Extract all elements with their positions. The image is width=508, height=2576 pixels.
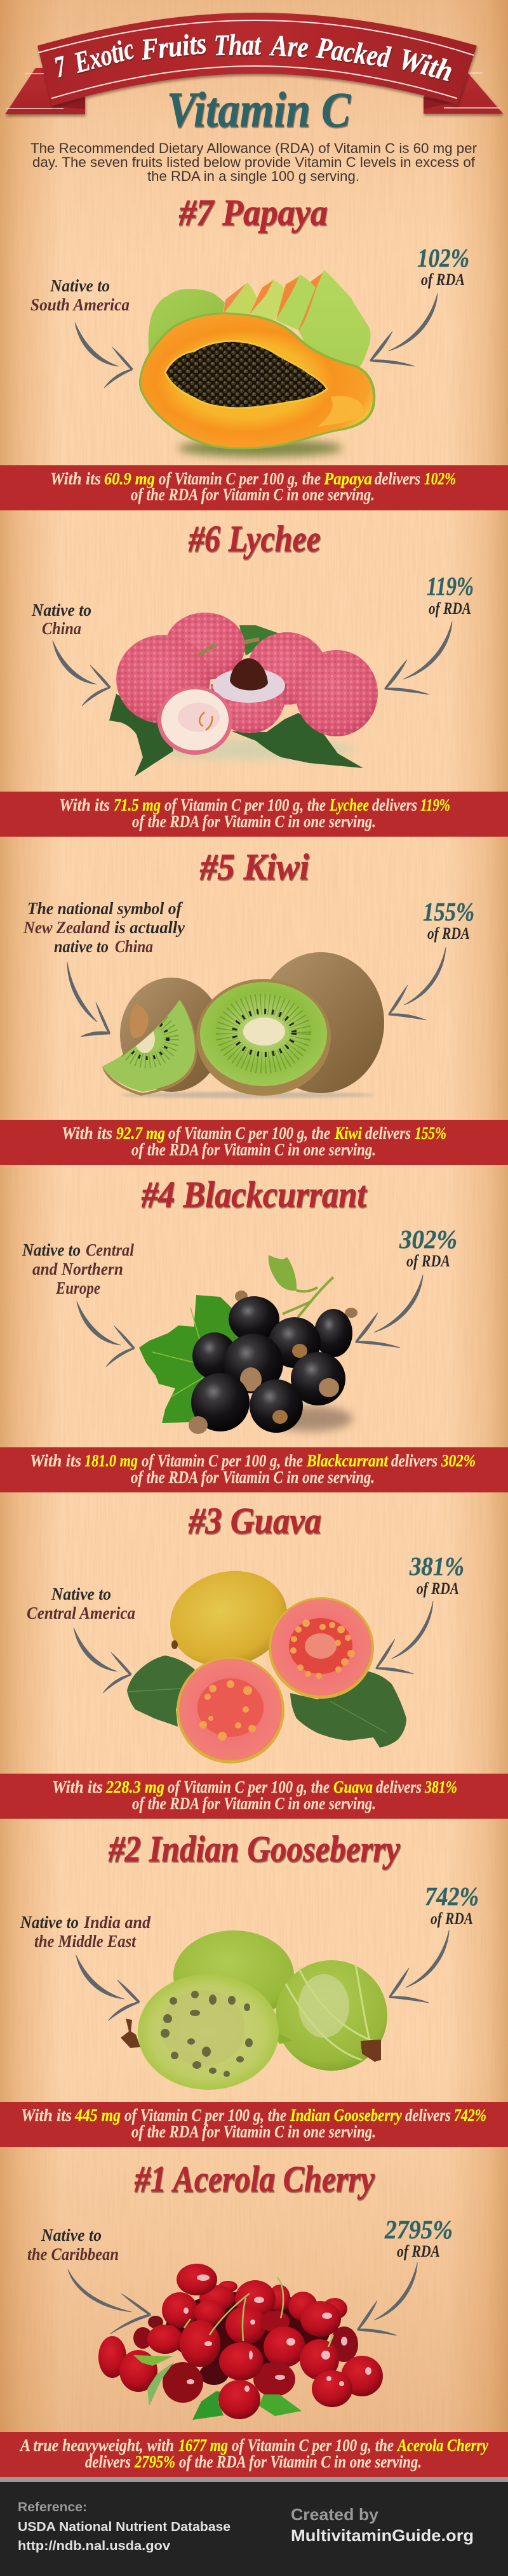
fact band: of Vitamin C per 100 g, the (124, 2106, 286, 2125)
fact band: delivers (391, 1451, 438, 1470)
fact band: of Vitamin C per 100 g, the (142, 1451, 303, 1470)
RDA stat (384, 2215, 453, 2261)
title text: Fruits (139, 27, 208, 67)
RDA stat: 155% (423, 897, 474, 926)
origin note: China (42, 619, 81, 638)
fact band: delivers (375, 469, 420, 488)
kiwi illustration (102, 952, 384, 1098)
fact band: 445 mg (74, 2106, 121, 2125)
fact band: 228.3 mg (105, 1777, 164, 1796)
fact band: 2795% (134, 2452, 175, 2471)
fact band: With its (30, 1451, 81, 1470)
panel: acerola cherry (0, 2158, 508, 2477)
arrow right (358, 2262, 417, 2335)
arrow right (389, 1930, 449, 2003)
fact band (0, 2102, 508, 2147)
reference block (18, 2500, 231, 2553)
arrow left (77, 1301, 135, 1367)
RDA stat: of RDA (427, 924, 470, 943)
title ribbon banner (5, 13, 503, 114)
RDA stat (427, 571, 474, 618)
cherry stems (184, 2278, 333, 2347)
origin note: Native to (31, 601, 91, 620)
origin note: Central America (27, 1603, 135, 1623)
RDA stat: of RDA (429, 599, 471, 618)
fact band: of Vitamin C per 100 g, the (159, 469, 321, 488)
arrow right (389, 947, 446, 1020)
reference block: http://ndb.nal.usda.gov (18, 2539, 171, 2553)
arrow right (370, 293, 438, 366)
RDA stat: of RDA (431, 1909, 473, 1928)
credit block (291, 2505, 474, 2545)
RDA stat: of RDA (397, 2242, 440, 2261)
fact band: delivers (376, 1777, 422, 1796)
origin note: native to (54, 937, 109, 956)
origin note: Native to (50, 276, 110, 295)
heading: #4 Blackcurrant (141, 1174, 368, 1215)
RDA stat: 742% (425, 1882, 479, 1911)
fact band: Indian Gooseberry (290, 2106, 403, 2125)
RDA stat (423, 897, 474, 943)
title text: Are (269, 29, 309, 64)
origin note (27, 2226, 119, 2264)
heading: #7 Papaya (178, 192, 328, 233)
fact band: of the RDA for Vitamin C in one serving. (131, 485, 375, 504)
arrow left (53, 641, 110, 706)
fact band: Papaya (323, 469, 372, 488)
RDA stat (417, 243, 469, 289)
fact band: 1677 mg (178, 2436, 228, 2455)
arrow right (356, 1275, 423, 1348)
origin note (20, 1913, 150, 1951)
intro paragraph: the RDA in a single 100 g serving. (147, 168, 359, 184)
fact band: With its (52, 1777, 103, 1796)
RDA stat: 302% (399, 1225, 457, 1254)
intro paragraph: The Recommended Dietary Allowance (RDA) of Vitamin C is 60 mg per (30, 140, 477, 156)
fact band: With its (21, 2106, 72, 2125)
fact band: of Vitamin C per 100 g, the (168, 1124, 330, 1143)
fact band: of Vitamin C per 100 g, the (168, 1777, 330, 1796)
lychee illustration (109, 613, 378, 776)
fact band: With its (62, 1124, 112, 1143)
heading: #3 Guava (188, 1500, 321, 1541)
origin note: Europe (55, 1278, 100, 1298)
panel: guava (0, 1500, 508, 1819)
RDA stat (425, 1882, 479, 1928)
banner arc (37, 13, 477, 106)
title text (51, 27, 457, 88)
arrow left (67, 962, 110, 1037)
RDA stat: of RDA (421, 270, 465, 289)
panel: papaya (0, 192, 508, 510)
fact band: 102% (424, 469, 456, 488)
origin note: and Northern (32, 1259, 123, 1278)
fact band: Guava (333, 1777, 373, 1796)
fact band: A true heavyweight, with (19, 2436, 174, 2455)
panel: blackcurrant (0, 1174, 508, 1492)
fact band: Acerola Cherry (396, 2436, 489, 2455)
origin note: Native to (20, 1913, 79, 1932)
arrow left (74, 1628, 131, 1693)
origin note: Native to (51, 1584, 111, 1603)
credit block: MultivitaminGuide.org (291, 2526, 474, 2545)
reference block: Reference: (18, 2500, 87, 2514)
title text: 7 (51, 50, 70, 84)
title text: That (213, 29, 262, 62)
heading: #5 Kiwi (199, 846, 309, 887)
panel: lychee (0, 518, 508, 837)
fact band: 92.7 mg (116, 1124, 165, 1143)
origin note: China (115, 937, 153, 956)
RDA stat: of RDA (406, 1252, 450, 1270)
fact band: 71.5 mg (114, 795, 161, 814)
fact band (0, 465, 508, 510)
origin note: New Zealand (23, 918, 110, 937)
origin note: South America (30, 295, 130, 314)
RDA stat: of RDA (417, 1579, 459, 1598)
title text: Exotic (70, 32, 138, 80)
banner left tail (5, 68, 85, 114)
fact band: of the RDA for Vitamin C in one serving. (132, 1794, 376, 1813)
fact band: delivers (405, 2106, 451, 2125)
RDA stat: 119% (427, 571, 474, 601)
fact band: 181.0 mg (84, 1451, 138, 1470)
blackcurrant illustration (139, 1255, 358, 1434)
origin note: India and (83, 1913, 150, 1932)
cherry illustration (98, 2264, 383, 2420)
origin note (27, 1584, 135, 1623)
arrow right (385, 621, 452, 694)
origin note: Native to (41, 2226, 102, 2245)
RDA stat (399, 1225, 457, 1270)
fact band: of the RDA for Vitamin C in one serving. (131, 1468, 375, 1487)
fact band: delivers (85, 2452, 131, 2471)
RDA stat: 381% (409, 1551, 464, 1581)
footer (0, 2477, 508, 2576)
fact band (0, 2432, 508, 2477)
banner stitching lines (38, 20, 474, 98)
arrow left (76, 1955, 140, 2021)
heading: #6 Lychee (188, 518, 321, 559)
RDA stat: 102% (417, 243, 469, 272)
origin note (31, 601, 91, 638)
fact band: of Vitamin C per 100 g, the (164, 795, 326, 814)
intro paragraph: day. The seven fruits listed below provide Vitamin C levels in excess of (32, 154, 476, 170)
origin note: Central (86, 1240, 134, 1259)
arrow right (376, 1601, 433, 1674)
fact band: of the RDA for Vitamin C in one serving. (132, 812, 376, 831)
fact band: of the RDA for Vitamin C in one serving. (131, 1140, 376, 1159)
fact band (0, 1774, 508, 1819)
cherry highlights (184, 2274, 371, 2392)
origin note: The national symbol of (27, 899, 184, 918)
gooseberry illustration (121, 1930, 387, 2090)
panel: kiwi (0, 846, 508, 1165)
fact band: Blackcurrant (306, 1451, 389, 1470)
title text: Packed (314, 31, 393, 74)
fact band: delivers (365, 1124, 411, 1143)
fact band: 155% (415, 1124, 446, 1143)
arrow left (68, 2269, 150, 2334)
reference block: USDA National Nutrient Database (18, 2520, 231, 2534)
fact band: of the RDA for Vitamin C in one serving. (131, 2122, 376, 2141)
origin note: Native to (22, 1240, 81, 1259)
credit block: Created by (291, 2505, 379, 2524)
fact band: of Vitamin C per 100 g, the (232, 2436, 394, 2455)
fact band: With its (50, 469, 101, 488)
origin note (22, 1240, 134, 1298)
fact band: 302% (441, 1451, 476, 1470)
guava illustration (127, 1559, 406, 1763)
fact band: Lychee (329, 795, 369, 814)
fact band (0, 1447, 508, 1492)
fact band: of the RDA for Vitamin C in one serving. (179, 2452, 422, 2471)
title text: With (395, 42, 457, 88)
fact band: 119% (420, 795, 450, 814)
heading: #1 Acerola Cherry (134, 2158, 375, 2200)
fact band: 60.9 mg (104, 469, 155, 488)
heading: Vitamin C: Vitamin C (167, 82, 351, 137)
RDA stat (409, 1551, 464, 1598)
origin note: is actually (114, 918, 185, 937)
fact band: delivers (372, 795, 417, 814)
panel: indian gooseberry (0, 1828, 508, 2147)
fact band (0, 792, 508, 837)
papaya illustration (139, 270, 375, 457)
cherry leaves (133, 2355, 302, 2420)
fact band: Kiwi (334, 1124, 362, 1143)
fact band: With its (59, 795, 110, 814)
arrow left (75, 322, 133, 388)
banner right tail (424, 68, 503, 114)
origin note: the Caribbean (27, 2245, 119, 2264)
RDA stat: 2795% (384, 2215, 453, 2244)
fact band: 742% (454, 2106, 486, 2125)
intro paragraph (30, 140, 477, 184)
origin note (30, 276, 130, 314)
origin note: the Middle East (34, 1932, 137, 1951)
fact band (0, 1120, 508, 1165)
fact band: 381% (424, 1777, 457, 1796)
heading: #2 Indian Gooseberry (108, 1828, 400, 1869)
origin note (23, 899, 185, 956)
